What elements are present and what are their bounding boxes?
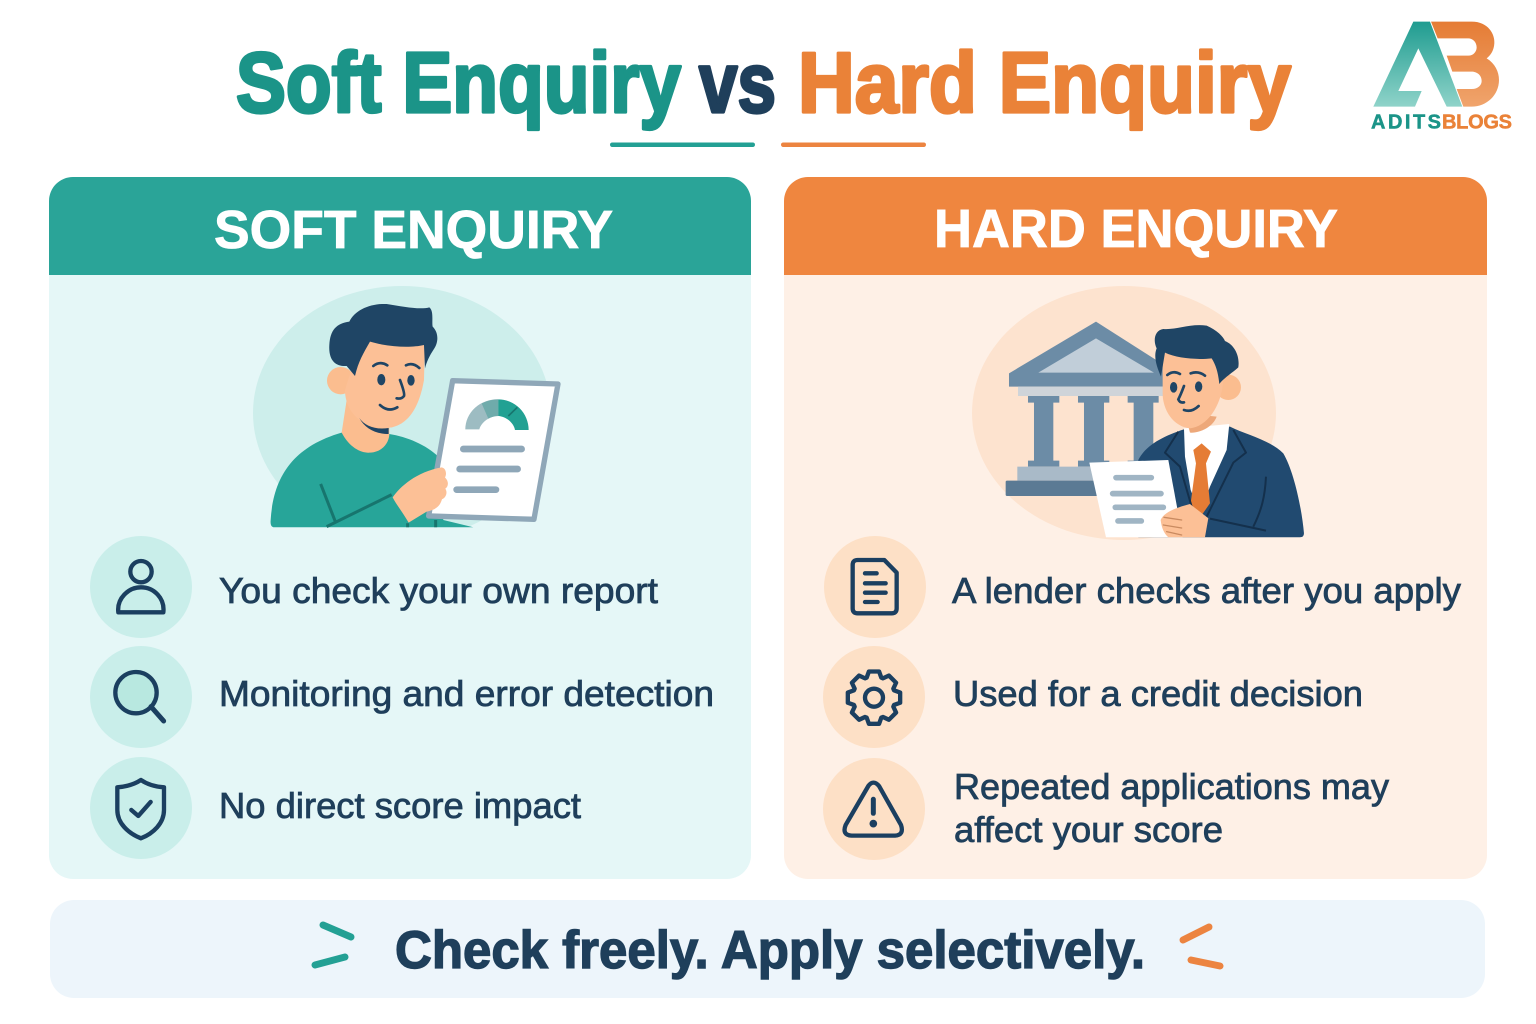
item text: lender checks: A lender checks after you apply (952, 570, 1461, 611)
list icon: magnifier (90, 646, 192, 748)
illustration: person checking own report (253, 286, 558, 540)
item text: no score impact: No direct score impact (219, 785, 581, 826)
title underlines (610, 142, 926, 147)
header: soft enquiry (49, 177, 751, 275)
title (236, 36, 1291, 131)
panel: soft enquiry (49, 177, 751, 879)
header: hard enquiry (784, 177, 1487, 275)
takeaway banner (50, 900, 1485, 998)
title: Hard Enquiry (798, 36, 1291, 131)
illustration: banker reviewing application (972, 286, 1304, 540)
item text: repeated applications: Repeated applications may (954, 766, 1389, 807)
header: soft enquiry: SOFT ENQUIRY (214, 200, 613, 260)
list icon: gear (823, 646, 925, 748)
title: Soft Enquiry (236, 36, 681, 131)
item text: repeated applications (954, 766, 1389, 850)
list icon: person (90, 536, 192, 638)
accent marks: teal (315, 925, 351, 965)
panel: hard enquiry (784, 177, 1487, 879)
logo: AditsBlogs: BLOGS (1442, 112, 1512, 134)
header: hard enquiry: HARD ENQUIRY (934, 199, 1338, 259)
accent marks: orange (1183, 927, 1220, 966)
panel body: soft (49, 177, 751, 879)
list icon: shield (90, 757, 192, 859)
logo: AditsBlogs (1371, 22, 1512, 134)
item text: own report: You check your own report (219, 570, 658, 611)
logo: AditsBlogs: ADITS (1371, 112, 1441, 134)
item text: credit decision: Used for a credit decision (953, 673, 1363, 714)
panel body: hard (784, 177, 1487, 879)
list icon: document (824, 536, 926, 638)
takeaway text: Check freely. Apply selectively. (395, 921, 1145, 980)
list icon: warning (823, 758, 925, 860)
item text: repeated applications: affect your score (954, 809, 1223, 850)
title: vs (699, 36, 776, 131)
item text: monitoring: Monitoring and error detection (219, 673, 714, 714)
